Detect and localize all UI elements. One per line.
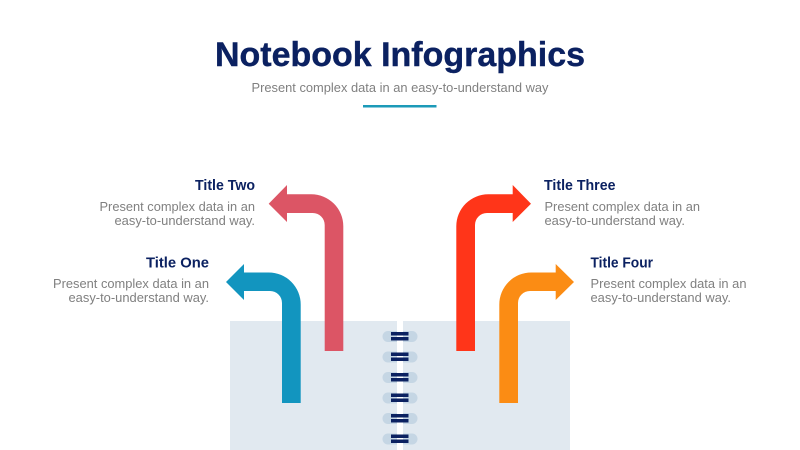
title underline	[363, 105, 436, 108]
arrow: title three	[456, 185, 531, 351]
text block: title three	[544, 177, 700, 228]
text block: title one	[53, 254, 209, 305]
text block: title one: Title One	[146, 254, 209, 272]
spiral rings	[382, 321, 418, 450]
text block: title four: Title Four	[590, 254, 653, 272]
text block: title one: Present complex data in an	[53, 276, 209, 291]
text block: title four: Present complex data in an	[590, 276, 746, 291]
text block: title two	[100, 177, 255, 228]
notebook	[230, 321, 570, 450]
notebook left page	[230, 321, 397, 450]
text block: title two: Present complex data in an	[100, 199, 255, 214]
arrow: title four	[499, 264, 574, 403]
notebook right page	[403, 321, 570, 450]
text block: title two: Title Two	[195, 177, 255, 194]
text block: title three: Title Three	[544, 177, 616, 194]
text block: title three: easy-to-understand way.	[544, 213, 685, 228]
text block: title three: Present complex data in an	[544, 199, 700, 214]
text block: title four: easy-to-understand way.	[590, 290, 731, 305]
arrow: title two	[269, 185, 343, 351]
arrow: title one	[226, 264, 301, 403]
title: Notebook Infographics	[215, 36, 585, 74]
text block: title four	[590, 254, 746, 305]
subtitle: Present complex data in an easy-to-understand way	[252, 80, 549, 95]
text block: title two: easy-to-understand way.	[114, 213, 255, 228]
text block: title one: easy-to-understand way.	[68, 290, 209, 305]
